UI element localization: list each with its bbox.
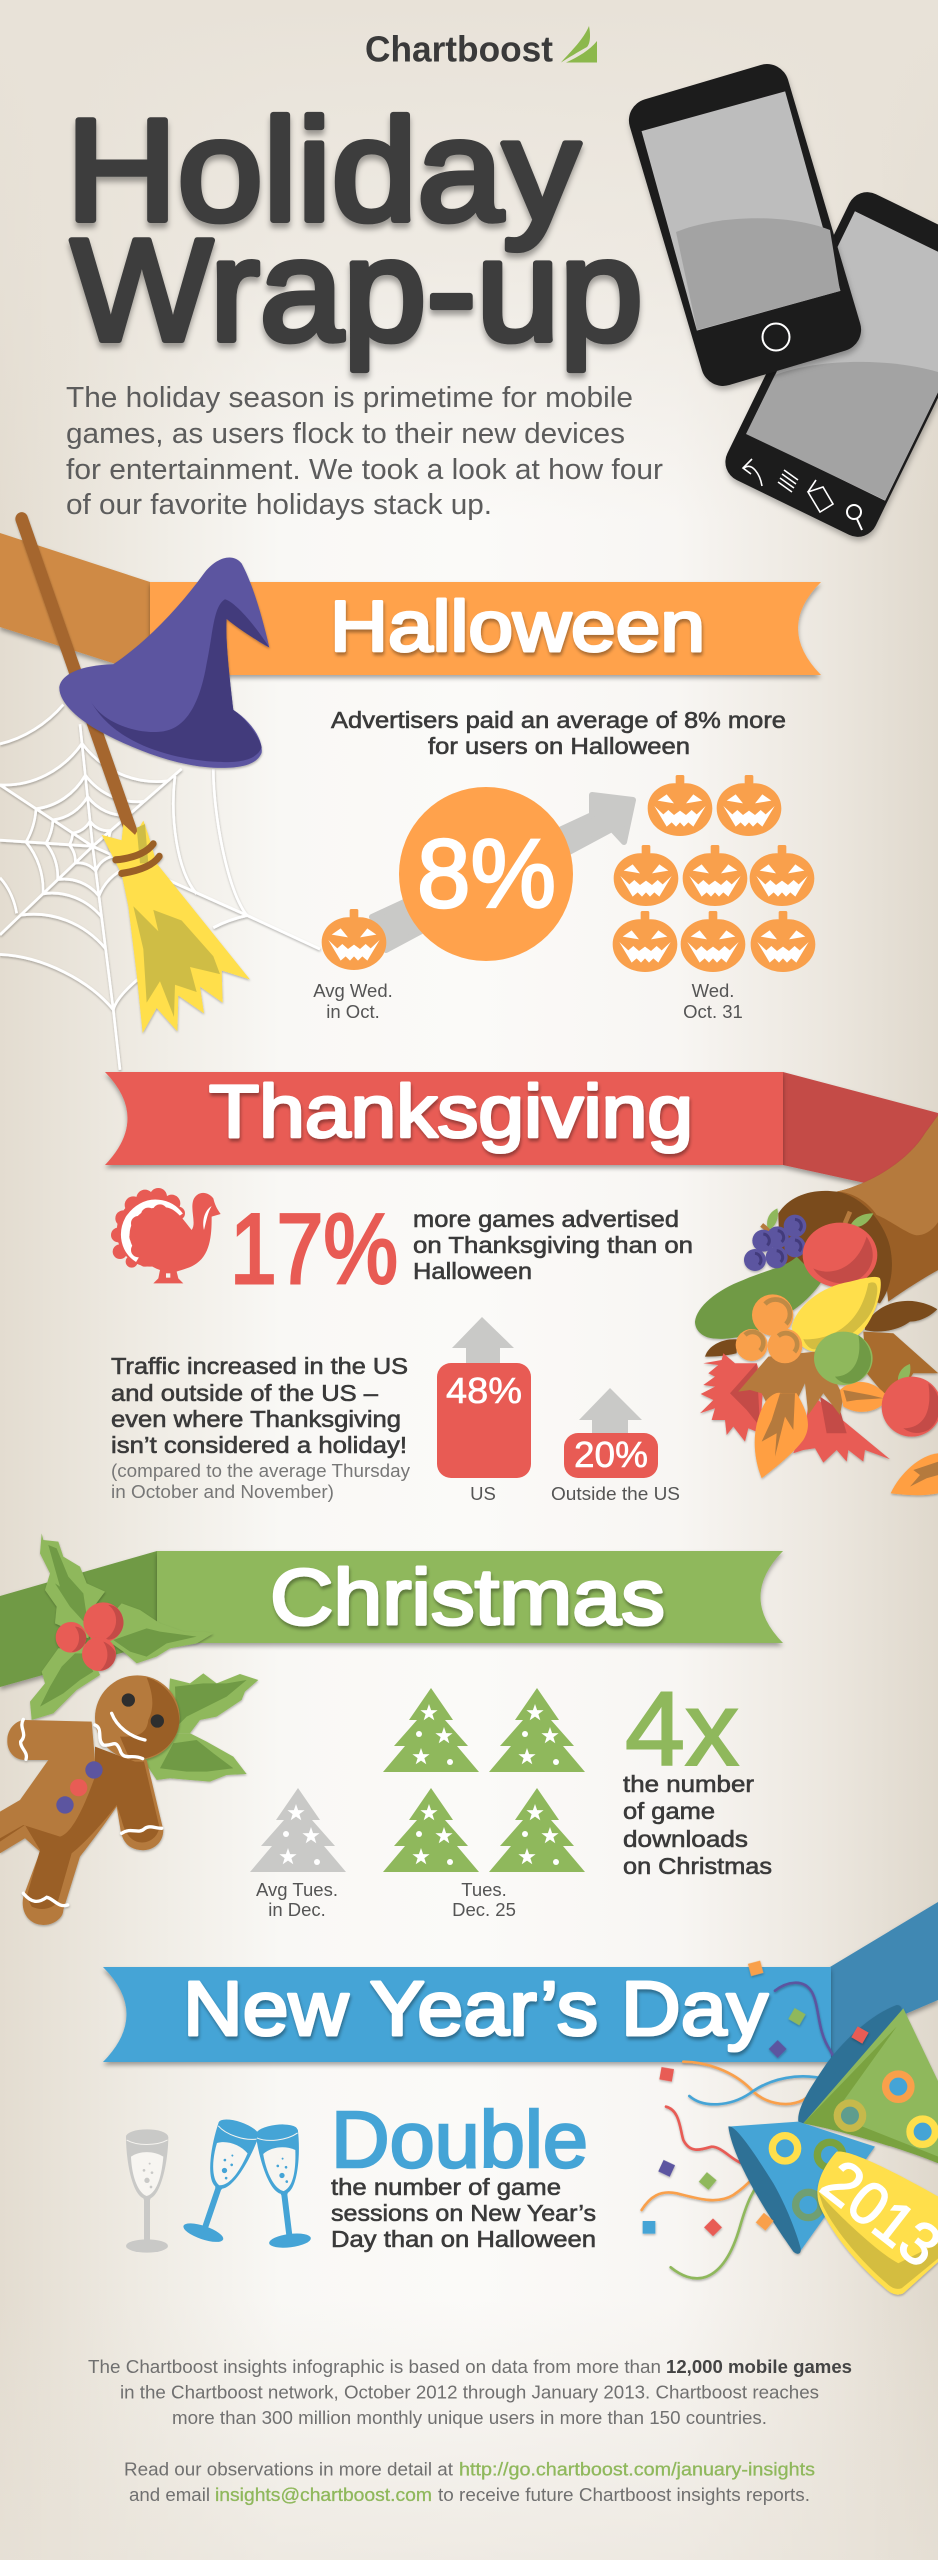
stat: 17%: 17% [230,1193,398,1304]
logo: Chartboost: Chartboost [365,28,553,70]
tree labels: Tues. [461,1879,507,1900]
spider web [0,705,320,1070]
callout: 8% circle [399,787,573,961]
footer text: http://go.chartboost.com/january-insights [459,2458,815,2480]
Thanksgiving statement: more games advertised [413,1206,679,1232]
Thanksgiving statement: on Thanksgiving than on [413,1232,693,1258]
panel: Thanksgiving banner [105,1070,938,1200]
stat: Double: Double [331,2095,588,2184]
tree labels: Avg Tues. [256,1879,338,1900]
intro text: for entertainment. We took a look at how four [66,454,663,486]
icon: cornucopia [695,1115,938,1495]
intro text: of our favorite holidays stack up. [66,489,492,521]
panel: Halloween banner: Halloween [330,588,705,667]
bar chart: traffic increase: Outside the US [551,1483,680,1504]
footer text: Read our observations in more detail at [124,2458,453,2480]
pictogram: one pumpkin [322,909,386,970]
panel: New Year's Day banner: New Year’s Day [183,1966,769,2052]
footer text: more than 300 million monthly unique users in more than 150 countries. [172,2407,767,2428]
traffic text: isn’t considered a holiday! [111,1432,407,1458]
tree labels: in Dec. [268,1899,326,1920]
footer text: The Chartboost insights infographic is based on data from more than [88,2356,661,2377]
Thanksgiving statement: Halloween [413,1258,532,1284]
pictogram: clinking blue glasses [181,2115,312,2250]
traffic text: and outside of the US – [111,1380,378,1406]
pictogram: grey glass [126,2129,168,2253]
panel: New Year's Day banner [103,1902,938,2062]
footer text: and email [129,2484,210,2505]
Christmas statement: on Christmas [623,1853,772,1879]
icon: gingerbread man [0,1675,180,1925]
footer text: insights@chartboost.com [215,2484,432,2505]
pictogram: grey tree [250,1788,346,1872]
bar chart: traffic increase: US [470,1483,496,1504]
panel: Christmas banner [0,1551,783,1687]
Christmas statement: the number [623,1771,754,1797]
intro text: The holiday season is primetime for mobile [66,382,633,414]
icon: witch hat [59,558,269,768]
footer text: in the Chartboost network, October 2012 through January 2013. Chartboost reaches [120,2382,819,2402]
traffic text: in October and November) [111,1481,334,1502]
traffic text: (compared to the average Thursday [111,1460,411,1481]
icon: holly [30,1533,258,1782]
New Year statement: Day than on Halloween [331,2226,596,2252]
Halloween statement: for users on Halloween [428,733,690,759]
footer text [88,2356,852,2505]
pumpkin labels: Oct. 31 [683,1001,743,1022]
icon: witch broom [22,519,250,1033]
bar chart: traffic increase: 20% [574,1434,648,1475]
intro text: games, as users flock to their new devices [66,418,625,450]
bar chart: traffic increase: 48% [446,1370,522,1411]
Christmas statement: of game [623,1798,715,1824]
intro text [66,382,663,521]
bar chart: traffic increase [437,1317,680,1504]
icon: turkey [111,1188,221,1283]
pumpkin labels [313,980,743,1022]
traffic text: Traffic increased in the US [111,1353,408,1379]
Halloween statement [331,707,786,759]
callout: 8% circle: 8% [417,819,556,928]
title: Holiday [66,89,581,251]
footer text: to receive future Chartboost insights reports. [438,2484,810,2505]
icon: party hats and confetti [642,1961,938,2295]
panel: Thanksgiving banner: Thanksgiving [209,1070,693,1153]
footer text: 12,000 mobile games [666,2356,852,2377]
Christmas statement [623,1771,772,1879]
pictogram: eight pumpkins [613,775,815,972]
New Year statement [331,2174,596,2252]
pumpkin labels: Avg Wed. [313,980,393,1001]
New Year statement: sessions on New Year’s [331,2200,596,2226]
icon: front phone [624,59,866,391]
Halloween statement: Advertisers paid an average of 8% more [331,707,786,733]
title: Wrap-up [71,209,643,371]
pictogram: four green trees [383,1688,585,1872]
stat: 4x: 4x [625,1671,739,1788]
New Year statement: the number of game [331,2174,561,2200]
Thanksgiving statement [413,1206,693,1284]
arrow: growth [372,795,633,950]
tree labels: Dec. 25 [452,1899,516,1920]
traffic text [111,1353,411,1502]
pumpkin labels: in Oct. [326,1001,380,1022]
Christmas statement: downloads [623,1826,748,1852]
icon: back phone [719,185,938,544]
tree labels [256,1879,516,1920]
panel: Christmas banner: Christmas [270,1552,665,1641]
panel: Halloween banner [0,533,821,675]
title [66,89,643,371]
pumpkin labels: Wed. [692,980,734,1001]
traffic text: even where Thanksgiving [111,1406,401,1432]
